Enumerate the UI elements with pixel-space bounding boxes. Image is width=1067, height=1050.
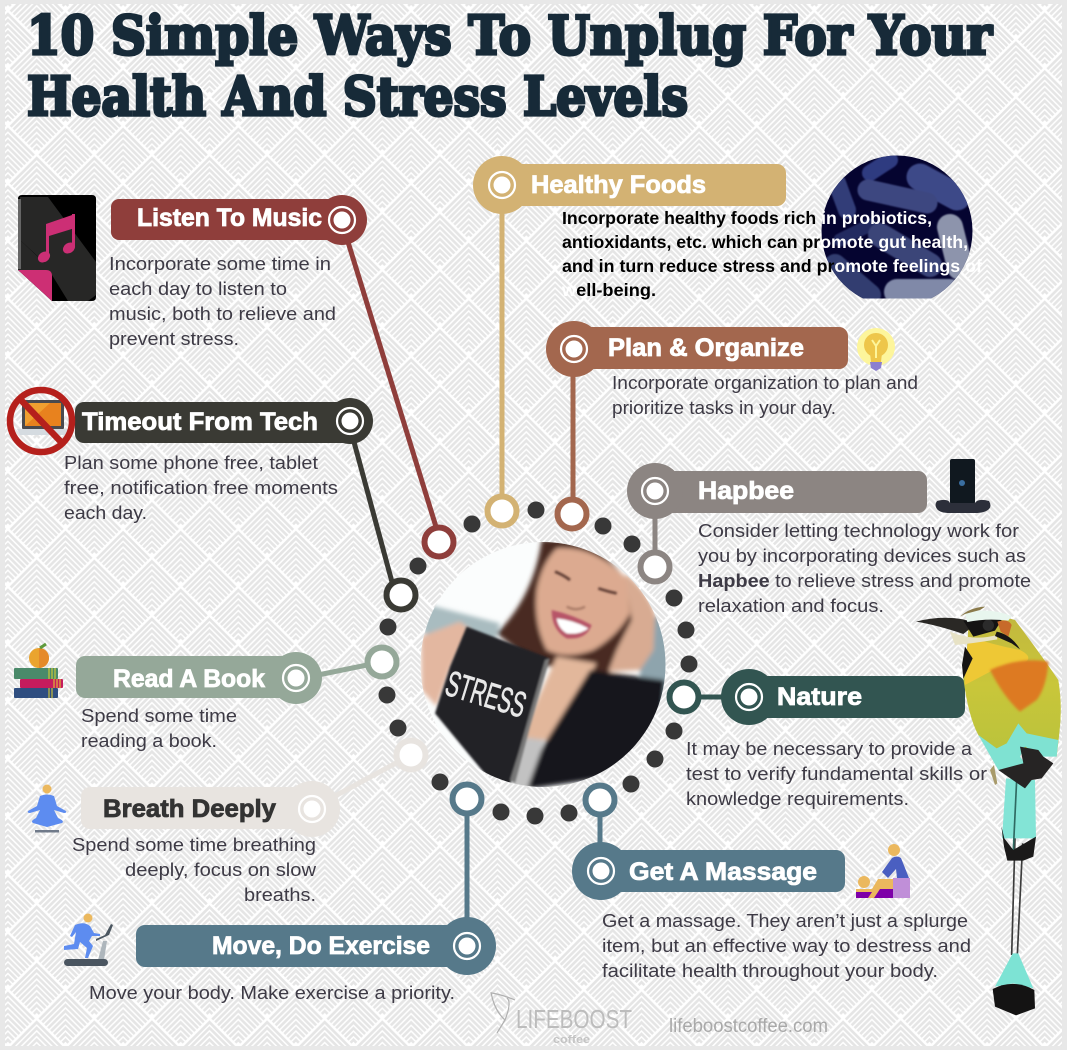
icon: hapbee device <box>936 459 990 513</box>
body text: breath: deeply, focus on slow <box>125 859 317 880</box>
body text: massage <box>602 910 971 981</box>
connector: breath <box>335 755 411 796</box>
panel: read a book <box>14 644 396 751</box>
node: hapbee <box>640 552 670 582</box>
body text: tech: Plan some phone free, tablet <box>64 452 318 473</box>
node: book <box>368 648 396 676</box>
body text: music <box>109 253 336 349</box>
heading bar: massage <box>572 842 845 900</box>
node: foods <box>488 496 516 526</box>
node: music <box>424 528 454 556</box>
body text: foods: antioxidants, etc. which can promote gut health, <box>562 232 968 252</box>
heading bar: music <box>111 195 367 245</box>
connector: nature <box>696 694 730 700</box>
node: tech <box>386 580 416 610</box>
body text: massage: Get a massage. They aren’t just a splurge <box>602 910 968 931</box>
connector: exercise <box>464 812 470 925</box>
body text: book <box>81 705 237 751</box>
heading bar: foods: Healthy Foods <box>531 171 706 199</box>
heading bar: book <box>76 652 322 704</box>
icon: music note file <box>18 195 96 301</box>
heading bar: hapbee: Hapbee <box>698 477 794 505</box>
body text: foods: Incorporate healthy foods rich in probiotics, <box>562 208 932 228</box>
heading bar: tech: Timeout From Tech <box>82 408 318 436</box>
logo wordmark: LIFEBOOST <box>516 1004 632 1034</box>
heading bar: nature <box>721 669 965 725</box>
heading bar: book: Read A Book <box>113 665 265 693</box>
heading bar: breath <box>81 781 340 837</box>
connector: massage <box>598 812 602 850</box>
icon: light bulb <box>857 328 895 371</box>
body text: nature: test to verify fundamental skills or <box>686 763 987 784</box>
heading bar: music: Listen To Music <box>137 204 322 232</box>
title: Health And Stress Levels <box>27 66 688 128</box>
body text: foods: and in turn reduce stress and pr omote feelings of <box>562 256 982 276</box>
connector: music <box>348 242 437 530</box>
node: massage <box>586 786 614 814</box>
body text: massage: facilitate health throughout your body. <box>602 960 938 981</box>
panel: listen to music <box>18 195 454 556</box>
body text: hapbee: Consider letting technology work for <box>698 520 1019 541</box>
connector: tech <box>354 442 392 582</box>
body text: exercise: Move your body. Make exercise a priority. <box>89 982 455 1003</box>
body text: hapbee: you by incorporating devices such as <box>698 545 1026 566</box>
body text: nature <box>686 738 987 809</box>
heading bar: breath: Breath Deeply <box>103 795 276 823</box>
body text: hapbee: Hapbee to relieve stress and promote <box>698 570 1031 591</box>
logo mark: bird sketch <box>491 992 515 1033</box>
body text: tech <box>64 452 338 523</box>
heading bar: nature: Nature <box>777 683 862 711</box>
connector: plan <box>570 372 576 500</box>
body text: music: music, both to relieve and <box>109 303 336 324</box>
heading bar: plan <box>546 321 848 377</box>
image: probiotic bacteria <box>822 156 972 298</box>
panel: plan and organize <box>546 321 918 528</box>
website url: lifeboostcoffee.com <box>669 1016 828 1037</box>
panel: move, do exercise <box>64 784 496 1003</box>
body text: massage: item, but an effective way to destress and <box>602 935 971 956</box>
icon: massage <box>856 844 910 898</box>
title <box>27 5 993 128</box>
body text: breath: breaths. <box>244 884 316 905</box>
heading bar: plan: Plan & Organize <box>608 334 804 362</box>
ring of small dots around photo <box>378 502 698 824</box>
panel: timeout from tech <box>10 390 416 610</box>
heading bar: foods <box>473 156 786 214</box>
central photo: stressed woman with mug <box>417 537 670 793</box>
body text: book: reading a book. <box>81 730 217 751</box>
icon: books and orange <box>14 644 63 698</box>
panel: nature <box>670 669 987 809</box>
heading bar: hapbee <box>627 463 927 519</box>
body text: book: Spend some time <box>81 705 237 726</box>
body text: plan: prioritize tasks in your day. <box>612 397 836 418</box>
panel: healthy foods <box>473 150 982 526</box>
body text: tech: each day. <box>64 502 147 523</box>
icon: no laptop <box>10 390 72 452</box>
body text: plan <box>612 372 918 418</box>
panel: breath deeply <box>28 740 426 905</box>
icon: meditating person <box>28 784 66 832</box>
mug lettering: STRESS <box>441 662 531 726</box>
panel: hapbee <box>627 459 1031 616</box>
title: 10 Simple Ways To Unplug For Your <box>27 5 993 67</box>
body text: music: Incorporate some time in <box>109 253 331 274</box>
heading bar: exercise <box>136 917 496 975</box>
body text: foods: well-being. <box>561 280 656 300</box>
node: plan <box>558 500 586 528</box>
body text: music: prevent stress. <box>109 328 239 349</box>
logo tagline: coffee <box>553 1034 590 1046</box>
body text: plan: Incorporate organization to plan and <box>612 372 918 393</box>
heading bar: exercise: Move, Do Exercise <box>212 932 430 960</box>
node: breath <box>396 740 426 770</box>
panel: get a massage <box>572 786 971 981</box>
connector: foods <box>500 210 504 497</box>
bird: turquoise-browed motmot <box>916 607 1061 1015</box>
body text: hapbee <box>698 520 1031 616</box>
heading bar: tech <box>75 398 373 444</box>
body text: foods <box>561 208 982 300</box>
body text: music: each day to listen to <box>109 278 287 299</box>
node: nature <box>670 682 698 712</box>
icon: treadmill runner <box>64 914 113 966</box>
body text: breath: Spend some time breathing <box>72 834 316 855</box>
body text: nature: knowledge requirements. <box>686 788 909 809</box>
logo: lifeboost coffee <box>491 992 632 1034</box>
heading bar: massage: Get A Massage <box>629 858 817 886</box>
connector: hapbee <box>652 515 658 555</box>
body text: nature: It may be necessary to provide a <box>686 738 973 759</box>
body text: breath <box>72 834 317 905</box>
node: exercise <box>452 784 482 814</box>
body text: hapbee: relaxation and focus. <box>698 595 884 616</box>
body text: tech: free, notification free moments <box>64 477 338 498</box>
connector: book <box>318 662 382 675</box>
